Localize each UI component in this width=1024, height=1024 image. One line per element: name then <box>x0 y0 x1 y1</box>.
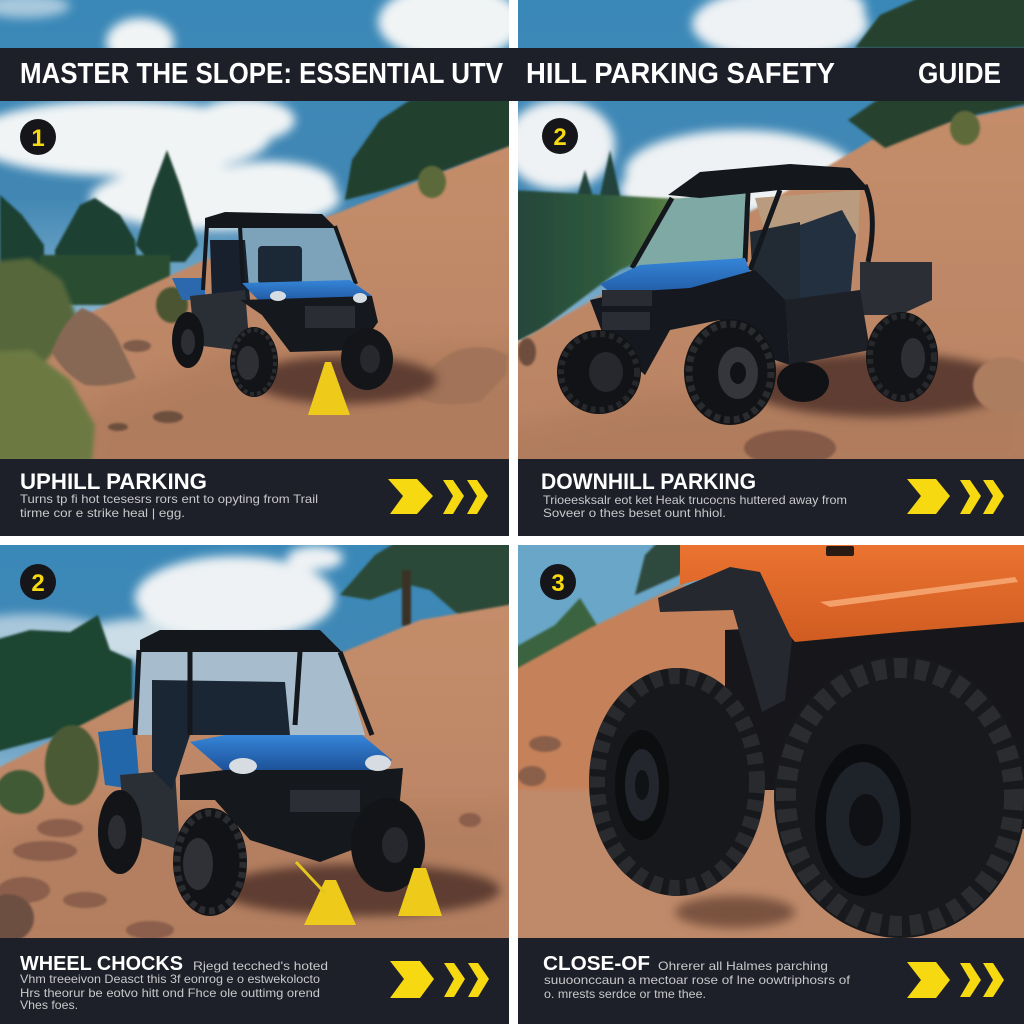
caption body <box>544 959 851 1001</box>
trees upper right <box>345 95 520 200</box>
dark fender <box>658 567 792 712</box>
foreground dirt <box>505 790 1024 950</box>
caption: wheel chocks <box>0 938 509 1024</box>
caption body: Trioeesksalr eot ket Heak trucocns huttered away from <box>543 493 847 507</box>
caption body: Ohrerer all Halmes parching <box>658 959 828 973</box>
caption body: suuoonccaun a mectoar rose of lne oowtriphosrs of <box>544 973 851 987</box>
number badge 3 <box>540 564 576 600</box>
sky <box>0 545 509 785</box>
shadow <box>220 864 500 916</box>
caption body <box>20 959 328 1012</box>
caption heading: CLOSE-OF <box>543 953 650 975</box>
UTV underbody <box>725 615 1024 830</box>
left grass <box>0 258 95 462</box>
caption body: o. mrests serdce or tme thee. <box>544 987 706 1001</box>
foreground dirt <box>500 385 1024 480</box>
rocks <box>518 736 561 786</box>
number badge 3: 3 <box>551 570 565 597</box>
front tyre <box>774 656 1024 938</box>
hillside <box>0 145 540 480</box>
caption body: Turns tp fi hot tcesesrs rors ent to opyting from Trail <box>20 492 318 506</box>
tree upper right <box>340 540 520 626</box>
rocks <box>52 287 508 431</box>
trees upper right <box>848 0 1024 148</box>
left forest <box>0 615 132 752</box>
rocks <box>0 813 481 942</box>
hillside <box>505 585 820 810</box>
wheel chock cones <box>296 862 442 925</box>
title text <box>20 58 1001 90</box>
UTV: downhill <box>557 164 938 425</box>
orange body panel <box>680 545 1024 642</box>
chevrons <box>907 479 1004 514</box>
clouds <box>0 0 522 230</box>
background trees <box>510 540 690 680</box>
chevrons <box>390 961 489 998</box>
foreground dirt <box>0 805 520 960</box>
caption body: Vhes foes. <box>20 998 78 1012</box>
left trees <box>510 150 700 345</box>
title text: GUIDE <box>918 58 1001 90</box>
caption heading: DOWNHILL PARKING <box>541 469 756 494</box>
wheel shadow <box>675 896 795 928</box>
rocks <box>518 338 1024 466</box>
caption: downhill parking <box>518 459 1024 536</box>
wheel chock cone <box>308 362 350 415</box>
caption body <box>543 493 847 520</box>
chevrons <box>907 962 1004 998</box>
caption body: Hrs theorur be eotvo hitt ond Fhce ole outtimg orend <box>20 986 320 1000</box>
title banner <box>0 48 1024 101</box>
rear tyre <box>589 668 765 896</box>
caption body <box>20 492 318 520</box>
title text: MASTER THE SLOPE: ESSENTIAL UTV <box>20 58 504 90</box>
caption: uphill parking <box>0 459 509 536</box>
clouds <box>505 0 868 214</box>
UTV: wheel chocks <box>98 630 425 916</box>
vehicle shadow <box>253 356 437 404</box>
caption body: Vhm treeeivon Deasct this 3f eonrog e o estwekolocto <box>20 972 320 986</box>
number badge 1 <box>20 119 56 155</box>
caption heading: UPHILL PARKING <box>20 469 207 494</box>
number badge 2: 2 <box>553 124 567 151</box>
clouds <box>0 546 343 662</box>
hillside <box>0 603 520 950</box>
caption body: Soveer o thes beset ount hhiol. <box>543 506 726 520</box>
sky <box>518 0 1024 340</box>
caption: close-up <box>518 938 1024 1024</box>
caption body: tirme cor e strike heal | egg. <box>20 506 185 520</box>
sky <box>0 0 509 330</box>
panel: close-up <box>518 545 1024 1024</box>
number badge 1: 1 <box>31 125 45 152</box>
sky <box>518 545 758 675</box>
panel: wheel chocks <box>0 545 509 1024</box>
number badge 2 <box>542 118 578 154</box>
foreground dirt <box>60 345 540 490</box>
bushes <box>0 725 99 814</box>
shadow <box>745 353 1015 417</box>
UTV: uphill <box>172 212 393 397</box>
distant trees <box>0 150 198 305</box>
chevrons <box>388 479 488 514</box>
caption body: Rjegd tecched's hoted <box>193 959 328 973</box>
title text: HILL PARKING SAFETY <box>526 58 835 90</box>
hillside <box>500 103 1024 480</box>
number badge 2 <box>20 564 56 600</box>
number badge 2: 2 <box>31 570 45 597</box>
caption heading: WHEEL CHOCKS <box>20 953 183 975</box>
